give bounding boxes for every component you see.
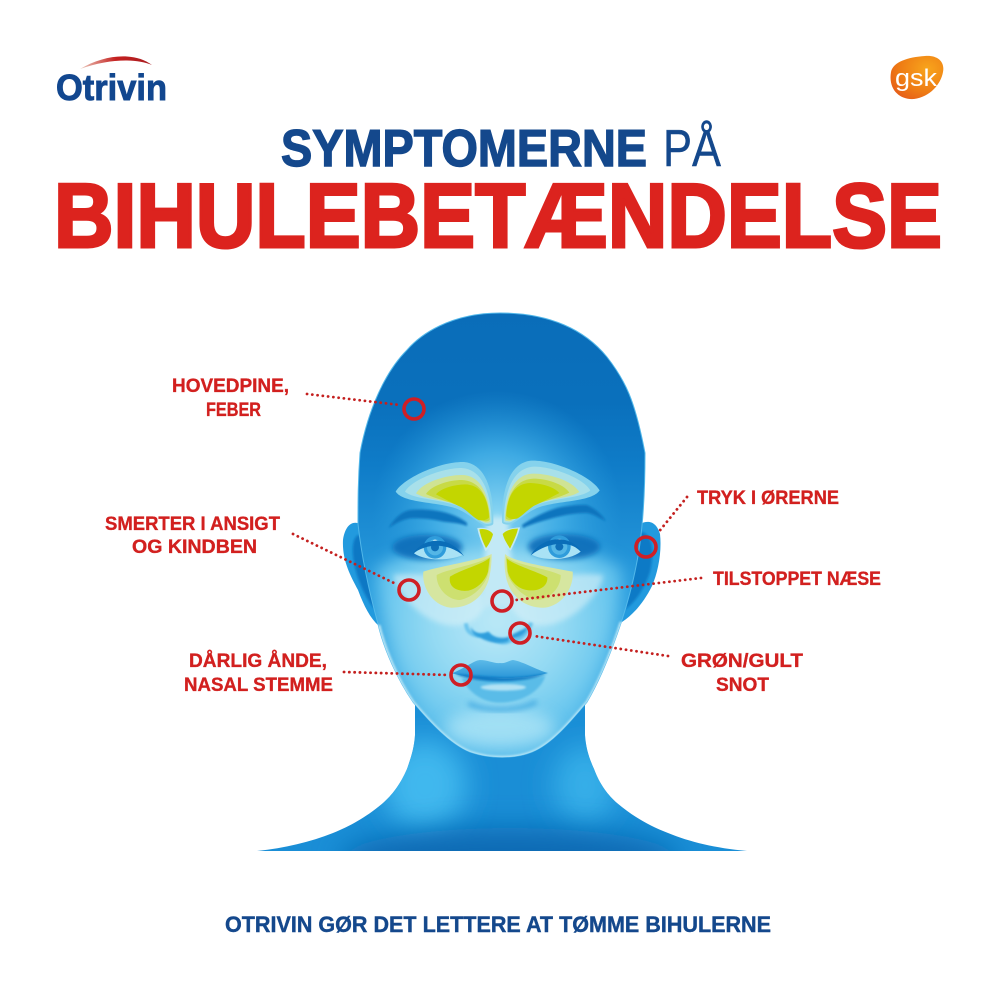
marker xyxy=(399,580,419,600)
marker xyxy=(451,665,471,685)
label: SNOT xyxy=(716,674,769,696)
label xyxy=(172,375,289,421)
right ethmoid sinus xyxy=(500,527,520,551)
neck base xyxy=(257,705,747,851)
chin highlight xyxy=(445,708,555,748)
left ethmoid sinus xyxy=(477,528,496,551)
lips xyxy=(452,660,548,709)
marker xyxy=(492,591,512,611)
forehead glow xyxy=(392,402,602,556)
left frontal sinus xyxy=(396,462,493,526)
label: FEBER xyxy=(206,399,261,421)
left neck glow xyxy=(383,739,467,831)
right frontal sinus xyxy=(502,461,600,525)
right maxillary sinus xyxy=(505,554,573,608)
callout: dårlig ånde, nasal stemme xyxy=(184,648,471,696)
nose bridge highlight xyxy=(480,517,517,607)
cheek halo left xyxy=(393,574,487,626)
left ear xyxy=(343,523,392,626)
logo arc xyxy=(80,56,152,69)
title line 1: SYMPTOMERNE xyxy=(281,120,647,178)
cheek halo right xyxy=(509,574,603,626)
right neck glow xyxy=(553,745,617,825)
footer tagline: OTRIVIN GØR DET LETTERE AT TØMME BIHULERNE xyxy=(225,912,771,937)
marker xyxy=(404,399,424,419)
left eyebrow xyxy=(388,509,467,528)
face glow xyxy=(376,548,622,759)
callout: tilstoppet næse xyxy=(492,568,881,611)
neck and shoulders xyxy=(257,705,747,851)
sinuses and features xyxy=(388,461,606,709)
jaw rim light xyxy=(379,622,621,757)
leader line xyxy=(307,394,400,405)
title xyxy=(54,120,942,267)
label: DÅRLIG ÅNDE, xyxy=(189,648,327,672)
leader line xyxy=(516,578,701,600)
marker xyxy=(510,623,530,643)
facial shading xyxy=(372,390,622,759)
label: GRØN/GULT xyxy=(681,650,803,672)
left maxillary sinus xyxy=(423,554,492,608)
leader line xyxy=(534,636,668,656)
callout: smerter i ansigt og kindben xyxy=(105,513,419,600)
right eye socket shadow xyxy=(528,534,600,559)
label: SMERTER I ANSIGT xyxy=(105,513,280,535)
label: HOVEDPINE, xyxy=(172,375,289,397)
left eye xyxy=(413,536,464,559)
label: NASAL STEMME xyxy=(184,674,333,696)
illustration: blue face with sinuses xyxy=(250,313,755,892)
label xyxy=(184,648,333,696)
logo: Otrivin xyxy=(56,56,167,108)
neck lower shadow xyxy=(340,814,680,851)
label: TRYK I ØRERNE xyxy=(697,487,839,509)
title word: på: PÅ xyxy=(663,120,721,178)
nose xyxy=(466,623,531,643)
logo: GSK xyxy=(891,56,943,99)
leader line xyxy=(657,497,687,534)
callout: grøn/gult snot xyxy=(510,623,803,696)
leader line xyxy=(293,534,396,584)
label xyxy=(105,513,280,558)
logo wordmark: Otrivin xyxy=(56,67,167,108)
right ear xyxy=(610,522,661,622)
label xyxy=(681,650,803,696)
label: OG KINDBEN xyxy=(132,536,257,558)
left eye socket shadow xyxy=(392,535,462,560)
logo letters: gsk xyxy=(895,65,938,92)
logo badge xyxy=(891,56,943,99)
right eyebrow xyxy=(522,505,606,528)
callout: tryk i ørerne xyxy=(636,487,839,557)
marker xyxy=(636,537,656,557)
leader line xyxy=(344,672,449,675)
head xyxy=(358,313,645,757)
right eye xyxy=(531,535,582,559)
callout: hovedpine, feber xyxy=(172,375,424,421)
label: TILSTOPPET NÆSE xyxy=(713,568,881,590)
